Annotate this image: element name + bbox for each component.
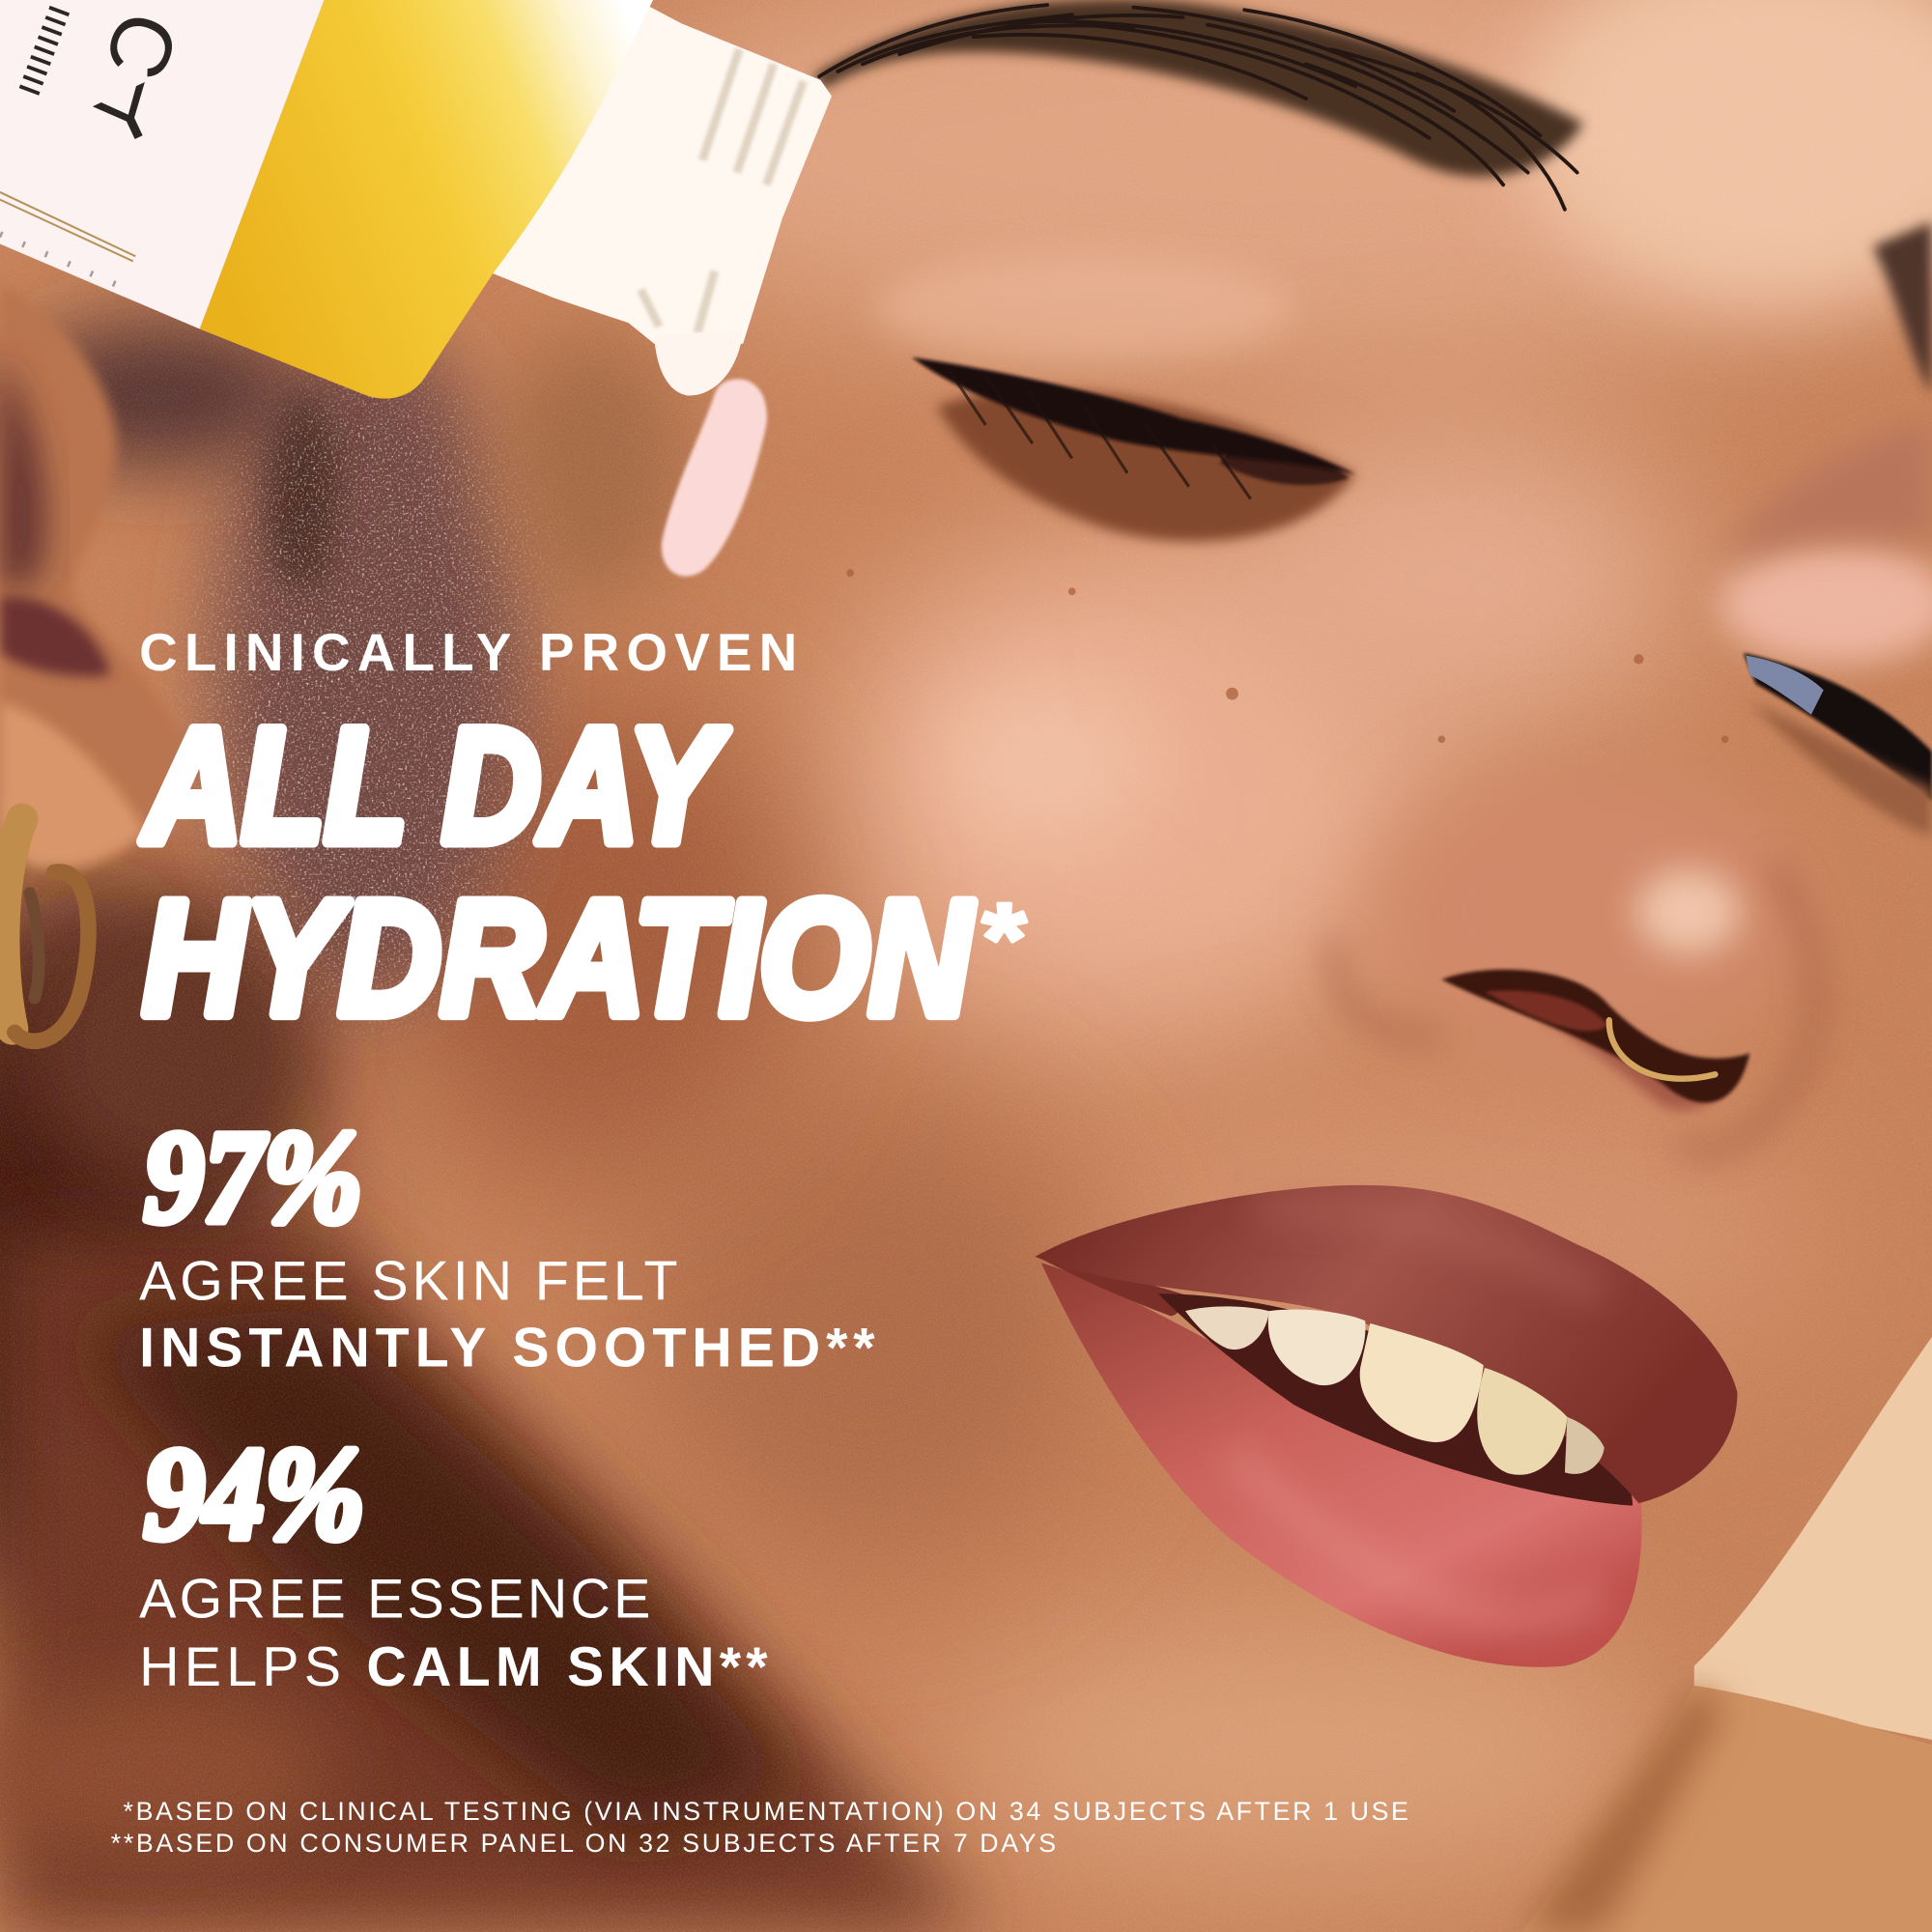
neck thread details xyxy=(640,49,804,332)
footnotes xyxy=(111,1797,1408,1858)
icon: gold earring xyxy=(4,819,89,1041)
stat description line 1: AGREE ESSENCE xyxy=(139,1569,650,1631)
stat: 94 percent xyxy=(139,1420,768,1698)
essence streak on cheek xyxy=(662,379,767,577)
label letter C: C xyxy=(86,0,198,92)
heading line: hydration: HYDRATION xyxy=(143,867,974,1049)
footnote one: *BASED ON CLINICAL TESTING (VIA INSTRUMENTATION) ON 34 SUBJECTS AFTER 1 USE xyxy=(124,1797,1408,1826)
closed eye and lid xyxy=(875,252,1355,542)
icon: gold nose ring xyxy=(1609,1020,1716,1079)
bottle neck xyxy=(493,0,832,344)
stat description line 2: HELPS CALM SKIN** xyxy=(139,1636,768,1698)
stat description line 2: INSTANTLY SOOTHED** xyxy=(139,1318,875,1379)
heading line: all day: ALL DAY xyxy=(141,695,728,876)
product bottle xyxy=(0,0,832,399)
lips and teeth xyxy=(1035,1185,1737,1667)
stat description line 1: AGREE SKIN FELT xyxy=(139,1251,678,1313)
yellow bottle body xyxy=(200,0,653,399)
skin freckles xyxy=(846,569,1729,743)
heading asterisk: * xyxy=(982,883,1027,996)
nose xyxy=(1335,764,1816,1151)
milky drop from nozzle xyxy=(654,330,743,395)
ear and earring xyxy=(0,283,185,1041)
label lettering xyxy=(85,0,198,164)
eyebrow label: CLINICALLY PROVEN xyxy=(139,622,797,682)
temple shimmer speckle xyxy=(160,321,579,1084)
footnote two: **BASED ON CONSUMER PANEL ON 32 SUBJECTS AFTER 7 DAYS xyxy=(111,1829,1056,1858)
label letter Y: Y xyxy=(85,69,173,164)
stat: 97 percent xyxy=(139,1103,875,1379)
eyebrow xyxy=(813,0,1583,210)
stat value: 97% xyxy=(144,1103,362,1250)
text block: clinically proven headline xyxy=(139,622,1027,1049)
stat value: 94% xyxy=(144,1420,365,1567)
white label xyxy=(0,0,324,329)
backdrop and shoulder xyxy=(1521,1337,1932,1932)
right eye xyxy=(1719,222,1932,838)
